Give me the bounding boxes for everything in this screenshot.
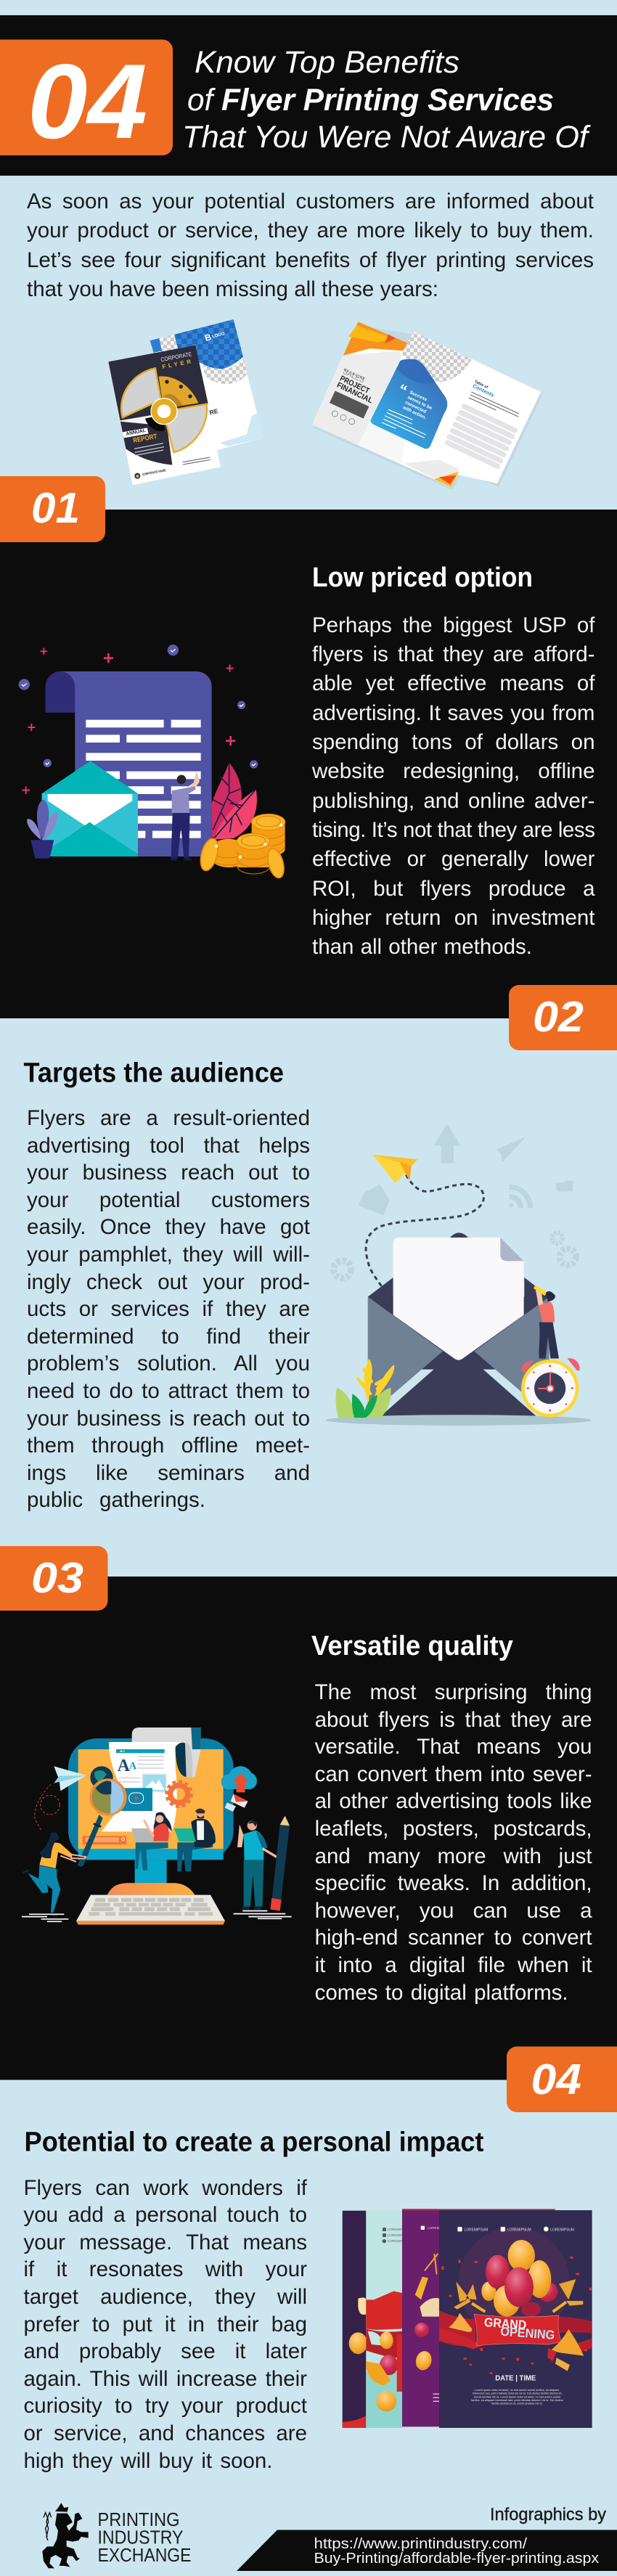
credit banner with URL: Buy-Printing/affordable-flyer-printing.aspx xyxy=(314,2551,599,2567)
section 2 body text: your business is reach out to xyxy=(27,1407,310,1431)
flyer 3 xyxy=(402,2209,555,2426)
header band xyxy=(0,15,617,176)
header number badge xyxy=(0,39,173,160)
section 4 body text: if it resonates with your xyxy=(23,2257,307,2281)
person with laptop, beard xyxy=(174,1809,216,1871)
coins xyxy=(197,814,287,880)
illustration: brochure: with action. xyxy=(401,405,427,421)
faint background icons xyxy=(334,1124,576,1278)
brochure right page xyxy=(399,332,541,483)
document xyxy=(102,1727,201,1831)
flyer 2 xyxy=(366,2210,403,2428)
illustration: brochure: Contents xyxy=(472,383,495,398)
section 1 body text: effective or generally lower xyxy=(312,847,595,871)
number badge 02: 02 xyxy=(533,993,584,1041)
globe and magnifier xyxy=(78,1766,126,1866)
plant xyxy=(27,800,57,859)
section 4 body text: curiosity to try your product xyxy=(23,2394,307,2418)
front flyer: CORPORATE xyxy=(160,351,192,363)
number badge 03 xyxy=(0,1546,107,1611)
monitor xyxy=(68,1738,234,1895)
flyer 1 xyxy=(343,2211,367,2428)
section 3 body text: comes to digital platforms. xyxy=(315,1981,568,2005)
section 2 body text: ings like seminars and xyxy=(27,1461,310,1485)
illustration: brochure xyxy=(312,322,542,490)
title xyxy=(182,45,591,155)
section 4 body text: target audience, they will xyxy=(23,2285,307,2309)
flyer 4: front: eventi ancillae his et. Lorem ipsum dolor sit amet, no sed autem soluta xyxy=(474,2395,561,2398)
heading: Low priced option: Low priced option xyxy=(312,563,533,593)
back flyer: RE xyxy=(208,407,219,417)
illustration: brochure: SALES xyxy=(341,367,366,385)
illustration: brochure: PROJECT xyxy=(338,375,371,396)
intro text block: As soon as your potential customers are informed about xyxy=(27,189,594,213)
flyer 3: LOREM xyxy=(428,2226,440,2230)
intro text block: your product or service, they are more likely to buy them. xyxy=(27,218,594,242)
section 3 body text: al other advertising tools like xyxy=(315,1789,592,1813)
section 2 body text: your potential customers xyxy=(27,1188,310,1212)
credit banner with URL: https://www.printindustry.com/ xyxy=(314,2536,527,2552)
section 2 body text: advertising tool that helps xyxy=(27,1134,310,1158)
section 2 body text: need to do to attract them to xyxy=(27,1379,310,1403)
number badge 01: 01 xyxy=(31,484,80,532)
title: of Flyer Printing Services xyxy=(187,83,554,118)
section 2 body text: determined to find their xyxy=(27,1325,310,1349)
logo text: PRINTING xyxy=(97,2508,180,2530)
section 2 body text: easily. Once they have got xyxy=(27,1215,310,1239)
number badge 02 xyxy=(509,985,617,1050)
flyer 4: front: LOREMIPSUM xyxy=(507,2228,531,2232)
man with pencil xyxy=(237,1816,290,1911)
section 1 body text: higher return on investment xyxy=(312,906,595,930)
heading: Targets the audience: Targets the audience xyxy=(23,1058,284,1089)
section 4 body text: you add a personal touch to xyxy=(23,2203,307,2227)
logo: lion crest xyxy=(42,2503,89,2568)
flyer 4: front: lucilius, ea aliquam interesset sea, porro fabulas dolorum vix te. Est doctus xyxy=(471,2399,563,2402)
leaves xyxy=(212,763,257,840)
section 1 body text: flyers is that they are afford- xyxy=(312,642,595,666)
section 2 body text: Flyers are a result-oriented xyxy=(27,1106,310,1130)
back flyer: LOGO xyxy=(212,332,226,339)
person xyxy=(171,771,200,861)
gear xyxy=(167,1782,191,1806)
section 4 body text: again. This will increase their xyxy=(23,2367,307,2391)
section 1 body text: spending tons of dollars on xyxy=(312,730,595,754)
section 4 body text: or service, and chances are xyxy=(23,2421,307,2445)
flyer 2: LOREMIP xyxy=(388,2233,403,2237)
section 2 body text: problem’s solution. All you xyxy=(27,1352,310,1375)
cloud upload xyxy=(221,1766,257,1812)
section 4 body text: high they will buy it soon. xyxy=(23,2449,273,2473)
check badges xyxy=(19,645,258,769)
plus signs xyxy=(22,648,235,794)
intro text block: Let’s see four significant benefits of flyer printing services xyxy=(27,248,594,272)
section 1 body text: than all other methods. xyxy=(312,935,532,959)
header number badge: 04 xyxy=(28,42,147,160)
section 3 panel: Versatile quality xyxy=(0,1577,617,2080)
illustration: brochure: seems to be xyxy=(406,395,433,411)
section 1 panel: Low priced option xyxy=(0,510,617,1018)
illustration: brochure: “ xyxy=(396,381,409,400)
section 2 body text: your pamphlet, they will will- xyxy=(27,1243,310,1267)
section 3 body text: leaflets, posters, postcards, xyxy=(315,1817,592,1841)
illustration: corporate flyers xyxy=(108,319,263,485)
section 4 body text: Flyers can work wonders if xyxy=(23,2176,307,2200)
section 2 body text: ucts or services if they are xyxy=(27,1297,310,1321)
flyer 4: front: facilisi atomorum at, eventi ancillae his et. xyxy=(491,2403,543,2405)
section 3 body text: high-end scanner to convert xyxy=(315,1926,592,1950)
title: That You Were Not Aware Of xyxy=(182,120,591,155)
section 2 body text xyxy=(27,1106,310,1512)
illustration: brochure: HEADLINE xyxy=(343,367,367,381)
paper plane xyxy=(372,1155,417,1183)
illustration: grand opening flyers xyxy=(343,2209,592,2428)
illustration: scroll, envelope and coins xyxy=(19,645,287,880)
party poppers xyxy=(454,2279,583,2310)
section 3 body text: it into a digital file when it xyxy=(315,1953,592,1977)
credit: Infographics by: Infographics by xyxy=(490,2505,606,2524)
plants xyxy=(335,1359,394,1418)
intro text block xyxy=(27,189,594,301)
woman with magnifier xyxy=(23,1832,86,1915)
flyer 4: front: LOREMIPSUM xyxy=(465,2228,488,2232)
ribbon xyxy=(439,2310,592,2353)
illustration: envelope and paper plane xyxy=(325,1124,592,1426)
logo text: INDUSTRY xyxy=(97,2527,183,2548)
section 2 body text: them through offline meet- xyxy=(27,1434,310,1457)
section 1 body text: publishing, and online adver- xyxy=(312,789,595,813)
title: Know Top Benefits xyxy=(195,45,459,80)
small person xyxy=(534,1285,559,1359)
balloons xyxy=(481,2240,557,2317)
scroll xyxy=(46,671,212,856)
confetti xyxy=(441,2257,592,2374)
flyer 4: front: DATE | TIME xyxy=(495,2375,536,2383)
number badge 03: 03 xyxy=(31,1554,83,1602)
logo text xyxy=(97,2508,192,2566)
section 1 body text xyxy=(312,613,595,959)
illustration: monitor with team xyxy=(22,1727,292,1925)
section 1 body text: Perhaps the biggest USP of xyxy=(312,613,595,637)
ground marks xyxy=(22,1911,292,1921)
search bar xyxy=(83,1836,126,1844)
back flyer xyxy=(150,319,263,450)
section 1 body text: tising. It’s not that they are less xyxy=(312,818,595,842)
dashed flight path xyxy=(366,1174,483,1287)
section 4 body text xyxy=(23,2176,307,2473)
front flyer xyxy=(108,345,221,485)
heading: Potential to create a personal impact: Potential to create a personal impact xyxy=(25,2127,484,2157)
back flyer: B xyxy=(204,332,213,343)
section 2 body text: ingly check out your prod- xyxy=(27,1270,310,1294)
section 2 body text: your business reach out to xyxy=(27,1161,310,1185)
illustration: brochure: connected xyxy=(404,400,427,414)
front flyer: REPORT xyxy=(133,433,158,444)
section 3 body text: however, you can use a xyxy=(315,1899,592,1923)
section 4 body text: your message. That means xyxy=(23,2231,307,2254)
heading: Versatile quality: Versatile quality xyxy=(311,1631,513,1661)
illustration: brochure: FINANCIAL xyxy=(335,381,375,406)
person with laptop, red top xyxy=(131,1812,172,1870)
number badge 04: 04 xyxy=(531,2056,581,2103)
envelope xyxy=(42,761,138,856)
section 3 body text: and many more with just xyxy=(315,1844,592,1868)
section 1 body text: website redesigning, offline xyxy=(312,759,595,783)
flyer 4: front: Lorem ipsum dolor sit amet, no sed autem soluta lucilius, ea aliquam xyxy=(475,2389,559,2392)
section 3 body text: specific tweaks. In addition, xyxy=(315,1871,592,1895)
section 3 body text: about flyers is that they are xyxy=(315,1708,592,1732)
brochure left page xyxy=(312,322,459,487)
front flyer: CORPORATE NAME xyxy=(142,468,166,476)
credit banner with URL xyxy=(237,2530,617,2571)
envelope xyxy=(368,1232,549,1416)
dashed loop xyxy=(35,1784,60,1831)
document: A xyxy=(118,1757,131,1775)
logo text: EXCHANGE xyxy=(97,2544,192,2566)
keyboard xyxy=(76,1895,225,1925)
number badge 04 xyxy=(507,2047,617,2112)
ground shadow xyxy=(325,1415,592,1426)
flyer 2: LOREMIP xyxy=(388,2228,403,2231)
section 3 body text: versatile. That means you xyxy=(315,1735,592,1759)
paper plane xyxy=(54,1766,86,1791)
ribbon: OPENING xyxy=(500,2324,555,2342)
megaphones xyxy=(449,2313,584,2371)
section 1 body text: ROI, but flyers produce a xyxy=(312,877,595,901)
number badge 01 xyxy=(0,476,105,542)
section 3 body text xyxy=(315,1680,592,2005)
section 2 body text: public gatherings. xyxy=(27,1488,205,1512)
document: A xyxy=(129,1760,137,1772)
section 1 body text: advertising. It saves you from xyxy=(312,701,595,725)
intro text block: that you have been missing all these years: xyxy=(27,277,438,301)
illustration: brochure: Table of xyxy=(473,380,489,390)
section 1 body text: able yet effective means of xyxy=(312,671,595,695)
section 4 body text: and probably see it later xyxy=(23,2339,307,2363)
section 4 body text: prefer to put it in their bag xyxy=(23,2313,307,2336)
flyer 4: front: LOREMIPSUM xyxy=(550,2228,574,2232)
front flyer: FLYER xyxy=(162,358,194,370)
front flyer: ANNUAL xyxy=(126,428,147,437)
illustration: brochure: Success xyxy=(409,390,428,403)
flyer 4: front xyxy=(439,2210,592,2428)
ribbon: GRAND xyxy=(483,2315,527,2332)
flyer 4: front: interesset sea, porro fabulas dolorum vix te. Est doctus facilisi atomorum xyxy=(473,2392,562,2395)
section 3 body text: The most surprising thing xyxy=(315,1680,592,1704)
flyer 2: LOREMIP xyxy=(388,2239,403,2243)
section 3 body text: can convert them into sever- xyxy=(315,1762,592,1786)
clock xyxy=(521,1358,580,1415)
